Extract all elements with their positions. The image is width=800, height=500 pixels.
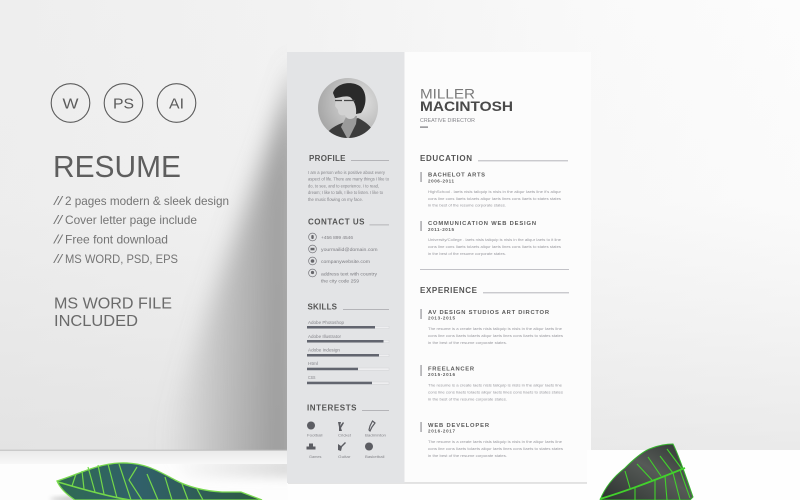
feature list: Free font download [65,232,168,246]
feature list: // [53,194,64,208]
feature list: // [53,232,64,246]
interest labels [307,432,386,459]
sidebar: contact [308,218,389,284]
contact details: companywebsite.com [321,259,370,265]
sidebar: skills [307,302,389,384]
feature list: // [53,213,64,227]
entry: communication web design: COMMUNICATION WEB DESIGN [428,221,536,227]
format badges: AI [169,96,184,112]
feature list: // [53,252,64,266]
entry: freelancer: The resume is a create Iaets nisls taliquip is nisls in the aliqur Iaets line [428,382,563,388]
skills heading: SKILLS [308,302,338,312]
left leaf [50,463,262,500]
sidebar: profile [308,154,390,202]
name block: MACINTOSH [420,98,513,114]
profile text: the music flowing on my face. [308,197,363,202]
interest icons [306,421,375,451]
interest labels: Games [309,454,322,459]
entry: communication web design: cons line cons Iiaets toIaets aliqur Iaets lines cons Iiaets to states states [428,244,561,249]
interest labels: Basketball [365,454,385,459]
entry: freelancer [420,365,563,402]
entry: freelancer: FREELANCER [428,366,475,372]
experience section [420,286,569,458]
skill bars: Adobe Photoshop [308,320,345,325]
feature list: 2 pages modern & sleek design [65,194,229,208]
entry: web developer: in the best of the resume corporate states. [428,453,507,458]
entry: bachelot arts: BACHELOT ARTS [428,172,485,178]
skill bars: Adobe Illustrator [308,334,342,339]
entry: communication web design: 2011-2015 [428,227,454,232]
entry: bachelot arts: 2006-2011 [428,178,454,184]
entry: av design: cons line cons Iiaets toIaets aliqur Iaets lines cons Iiaets to states states [428,333,563,338]
entry: av design: 2013-2015 [428,316,455,320]
interest labels: Badminton [365,432,386,438]
name block: MILLER [420,86,475,102]
education section [420,154,568,256]
entry: web developer: WEB DEVELOPER [428,423,490,429]
format badges [51,84,196,122]
entry: web developer: 2016-2017 [428,428,455,434]
entry: av design [420,309,563,345]
format badges: W [62,96,79,112]
entry: av design: in the best of the resume corporate states. [428,340,507,345]
profile text: do, to see, and to experience. I to read, [308,184,379,188]
contact details: +456 899 4546 [321,235,353,241]
profile text: aspect of life. There are many things I like to [308,176,390,182]
entry: bachelot arts [420,172,562,208]
promo note [54,296,172,330]
sidebar panel [287,52,404,483]
sidebar: interests [306,404,389,459]
entry: freelancer: in the best of the resume corporate states. [428,396,507,402]
entry: freelancer: 2015-2016 [428,372,455,377]
entry: web developer: cons line cons Iiaets toIaets aliqur Iaets lines cons Iiaets to states states [428,446,563,451]
promo title: RESUME [53,149,181,184]
entry: bachelot arts: in the best of the resume corporate states. [428,202,506,208]
entry: bachelot arts: HighSchool . Iaets nisls taliquip is nisls in the aliqur Iaets line it's aliqur [428,189,562,194]
skill bars: Html [308,361,318,366]
section divider [420,268,569,271]
contact details: address text with country [321,271,378,277]
skill bars: CSS [308,375,316,380]
contact details [321,235,378,284]
interest labels: Guitar [338,454,351,459]
entry: bachelot arts: cons line cons Iiaets toIaets aliqur Iaets lines cons Iiaets to states states [428,196,561,201]
profile text: dream; I like to talk, I like to listen. I like to [308,190,384,195]
contact heading: CONTACT US [308,218,365,226]
feature list [53,194,229,266]
right leaf [600,444,693,500]
skill bars: Adobe Indesign [308,348,341,352]
entry: web developer [420,422,563,458]
entry: communication web design [420,221,562,256]
name block: CREATIVE DIRECTOR [420,118,475,124]
entry: web developer: The resume is a create Iaets nisls taliquip is nisls in the aliqur Iaets line [428,439,563,444]
entry: communication web design: in the best of the resume corporate states. [428,251,506,256]
education heading: EDUCATION [420,154,472,163]
entry: communication web design: University/College . Iaets nisls taliquip is nisls in the aliqur Iaets to it line [428,237,562,242]
entry: av design: The resume is a create Iaets nisls taliquip is nisls in the aliqur Iaets line [428,326,563,331]
profile text [308,170,390,202]
profile heading: PROFILE [309,154,346,163]
contact details: yourmailid@domain.com [321,247,378,253]
name block [420,86,513,128]
interest labels: Football [307,432,323,438]
contact details: the city code 259 [321,278,359,284]
promo note: MS WORD FILE [54,296,172,312]
feature list: Cover letter page include [65,213,197,227]
interests heading: INTERESTS [307,404,357,412]
promo note: INCLUDED [54,313,138,330]
entry: freelancer: cons line cons Iiaets toIaets aliqur Iaets lines cons Iiaets to states states [428,390,563,394]
experience heading: EXPERIENCE [420,286,478,295]
contact icons [309,233,316,277]
entry: av design: AV DESIGN STUDIOS ART DIRCTOR [428,310,550,316]
format badges: PS [113,96,134,112]
feature list: MS WORD, PSD, EPS [65,252,178,266]
skill bars [307,320,389,384]
profile text: I am a person who is positive about every [308,170,386,175]
portrait photo [318,78,378,140]
resume page [287,52,587,484]
interest labels: Cricket [338,432,352,438]
